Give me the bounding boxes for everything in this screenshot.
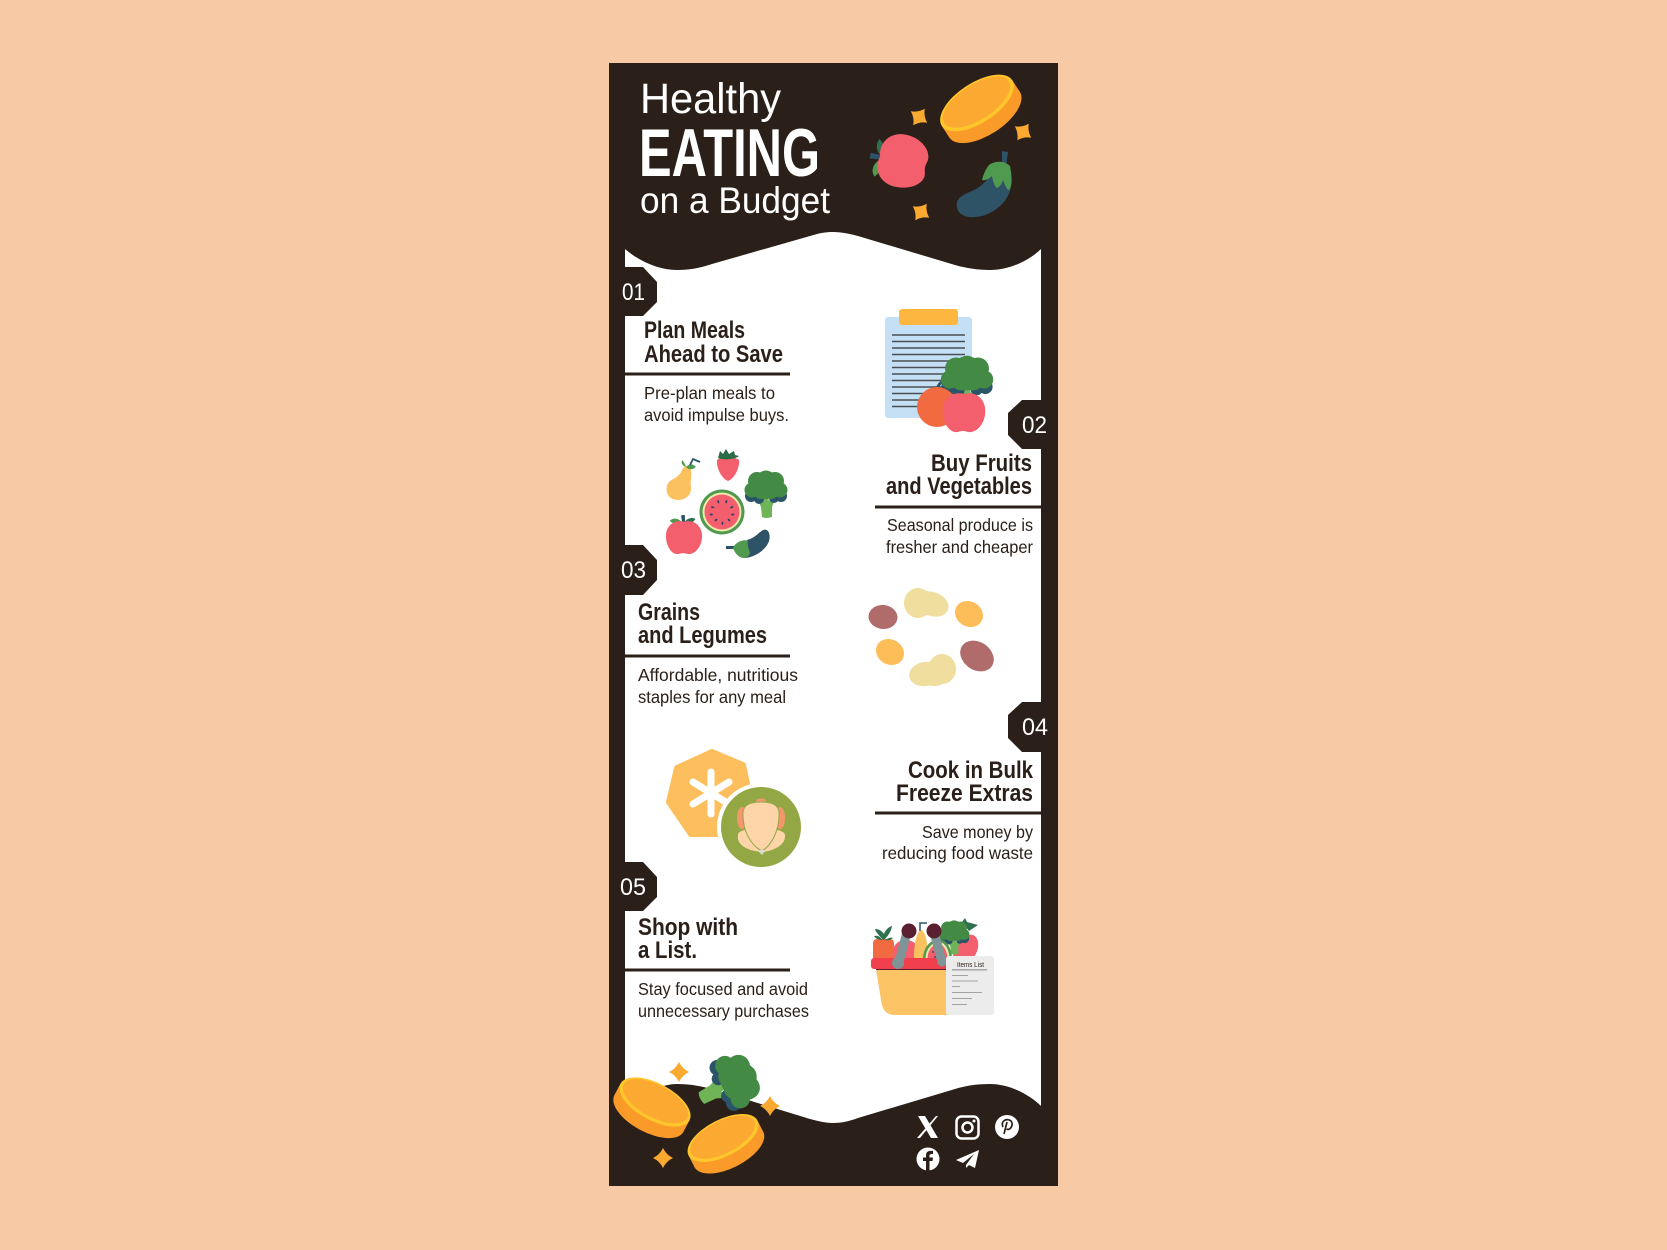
heading 03: and Legumes xyxy=(638,622,767,649)
heading 05 xyxy=(638,914,738,964)
number badge 05 xyxy=(620,862,657,911)
text 05 xyxy=(638,979,809,1021)
strawberry xyxy=(717,449,739,481)
title: EATING xyxy=(639,115,820,191)
snowflake xyxy=(693,772,729,814)
text 03: Affordable, nutritious xyxy=(638,665,798,685)
broccoli xyxy=(939,920,969,955)
icon: header food illustration xyxy=(865,63,1037,226)
carrot xyxy=(873,939,894,958)
chicken xyxy=(737,798,785,855)
panel: white content area with wavy edges xyxy=(625,232,1041,1123)
heading 02 xyxy=(886,450,1032,500)
step 04 xyxy=(875,702,1048,863)
text 04 xyxy=(882,822,1033,863)
icon: assorted fruits and vegetables xyxy=(666,449,788,558)
number badge 03 xyxy=(621,545,657,595)
icon: Pinterest xyxy=(995,1115,1019,1139)
icon: Telegram xyxy=(956,1150,979,1168)
number badge 05: 05 xyxy=(620,874,646,901)
step 05 xyxy=(620,862,809,1021)
heading 05: Shop with xyxy=(638,914,738,941)
text 02: fresher and cheaper xyxy=(886,537,1033,557)
text 04: Save money by xyxy=(922,822,1033,842)
freezer badge xyxy=(669,752,751,834)
icon: Facebook xyxy=(916,1148,940,1171)
heading 04: Cook in Bulk xyxy=(908,757,1034,784)
title: Healthy xyxy=(640,75,781,123)
text 01 xyxy=(644,383,789,425)
icon: grains and legumes xyxy=(868,587,1000,689)
number badge 02: 02 xyxy=(1022,412,1047,439)
leaves xyxy=(962,918,978,931)
icon: eggplant xyxy=(957,151,1012,217)
left apple xyxy=(893,940,921,958)
step 01 xyxy=(622,267,790,425)
text 02: Seasonal produce is xyxy=(887,515,1033,535)
text 01: avoid impulse buys. xyxy=(644,405,789,425)
text 03 xyxy=(638,665,798,707)
heading 05: a List. xyxy=(638,937,697,964)
heading 03: Grains xyxy=(638,599,700,626)
text 05: unnecessary purchases xyxy=(638,1001,809,1021)
pear xyxy=(914,930,928,958)
text 01: Pre-plan meals to xyxy=(644,383,775,403)
icon: footer food illustration xyxy=(606,1046,780,1183)
heading 04: Freeze Extras xyxy=(896,780,1033,807)
basket body xyxy=(876,969,952,1015)
sparkle right xyxy=(760,1096,780,1116)
number badge 03: 03 xyxy=(621,557,646,584)
heading 04 xyxy=(896,757,1034,807)
heading 02: and Vegetables xyxy=(886,473,1032,500)
title xyxy=(639,75,831,221)
number badge 04: 04 xyxy=(1022,714,1048,741)
heading 01 xyxy=(644,317,783,368)
heading 01: Plan Meals xyxy=(644,317,745,344)
icon: coin xyxy=(931,63,1031,154)
broccoli xyxy=(688,1046,767,1123)
broccoli xyxy=(744,470,788,518)
icon: shopping basket with list xyxy=(871,918,994,1015)
heading 03 xyxy=(638,599,767,649)
number badge 04 xyxy=(1008,702,1048,752)
icon: apple xyxy=(865,128,932,192)
sparkle bottom xyxy=(653,1148,673,1168)
title: on a Budget xyxy=(640,180,831,221)
icon: sparkle right xyxy=(1009,118,1037,146)
heading 01: Ahead to Save xyxy=(644,341,783,368)
icon: X xyxy=(917,1116,938,1138)
handles xyxy=(899,932,907,962)
icon: Instagram xyxy=(956,1116,978,1138)
text 02 xyxy=(886,515,1033,557)
text 05: Stay focused and avoid xyxy=(638,979,808,999)
step 03 xyxy=(621,545,798,707)
text 04: reducing food waste xyxy=(882,843,1033,863)
pear xyxy=(667,459,700,500)
watermelon xyxy=(700,490,744,534)
melon slice xyxy=(923,939,952,959)
apple xyxy=(666,515,702,554)
icon: clipboard with produce xyxy=(885,309,993,432)
coin left xyxy=(606,1067,698,1148)
social icons xyxy=(916,1115,1019,1171)
panel: dark infographic frame xyxy=(609,63,1058,1186)
items list paper: Items List xyxy=(957,962,984,969)
number badge 01 xyxy=(622,267,657,316)
coin right xyxy=(680,1104,772,1183)
sparkle top xyxy=(669,1062,689,1082)
number badge 02 xyxy=(1008,400,1047,449)
icon: frozen chicken xyxy=(669,752,805,871)
icon: sparkle bottom xyxy=(907,198,935,226)
heading 02: Buy Fruits xyxy=(931,450,1032,477)
icon: sparkle top left xyxy=(905,103,933,131)
eggplant xyxy=(726,530,770,558)
text 03: staples for any meal xyxy=(638,687,786,707)
step 02 xyxy=(875,400,1047,557)
number badge 01: 01 xyxy=(622,279,645,306)
right apple xyxy=(953,935,978,958)
